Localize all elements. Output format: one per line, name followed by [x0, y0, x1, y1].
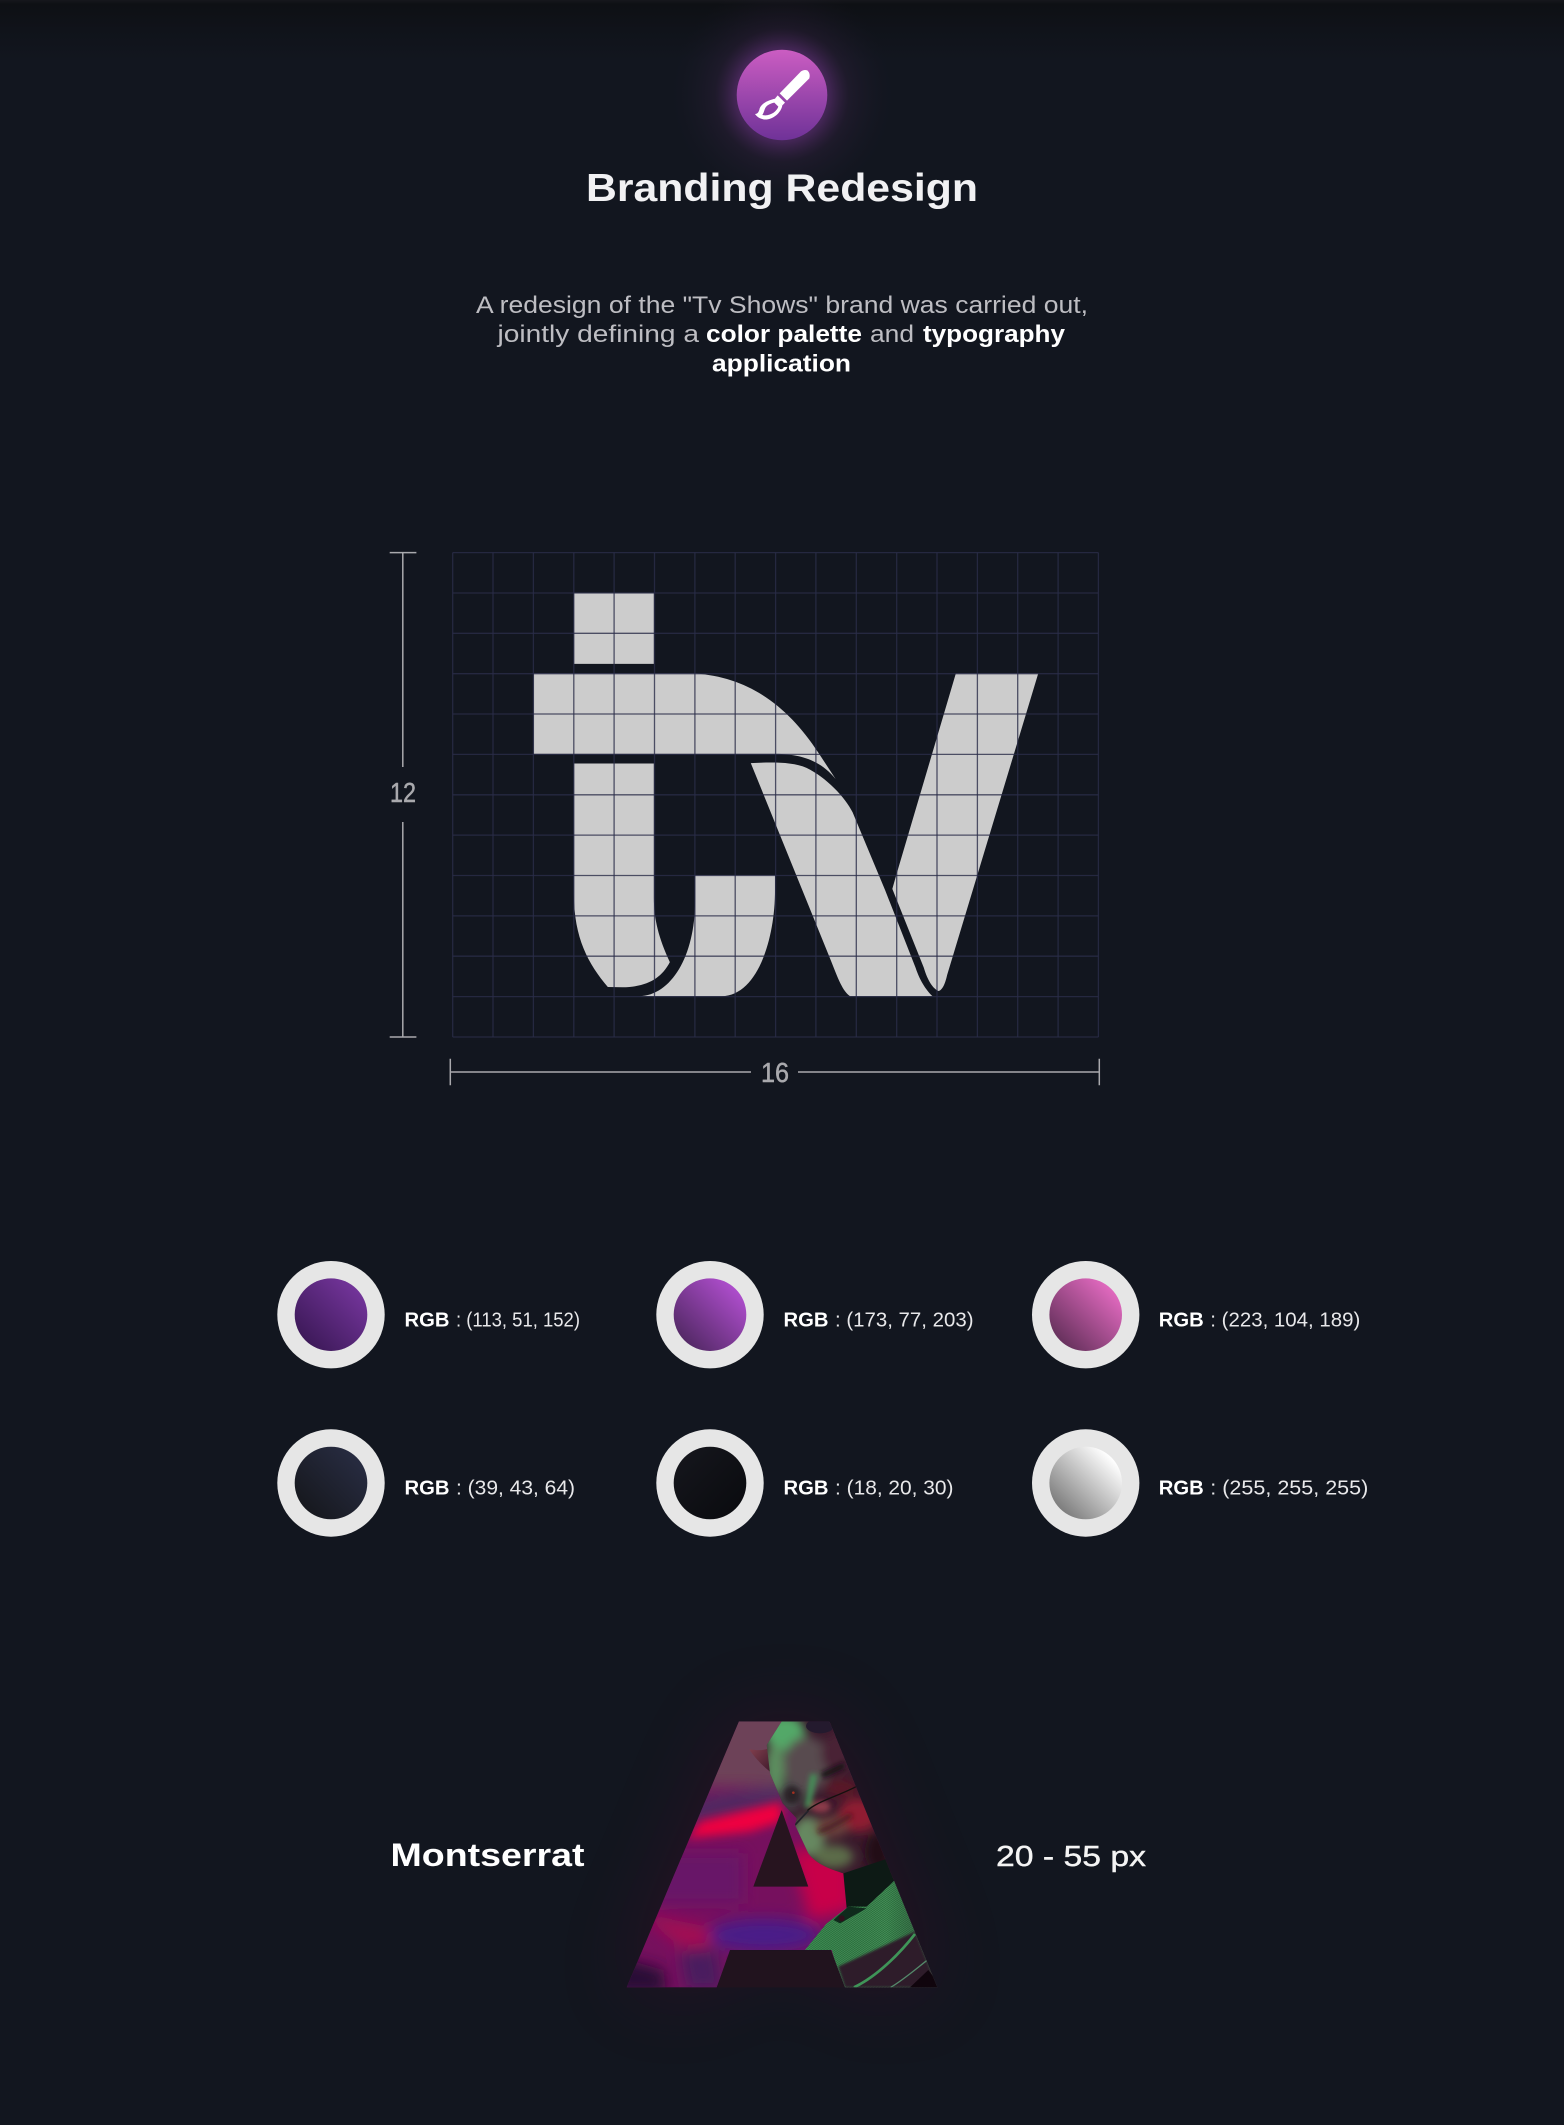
swatch: pink 223,104,189: : (223, 104, 189)	[1210, 1309, 1360, 1332]
swatch: violet 173,77,203	[656, 1261, 974, 1368]
photo figure: neck	[843, 1860, 904, 1908]
header icon: paintbrush badge	[670, 0, 894, 207]
photo-filled letter A	[626, 1717, 938, 1988]
title: Branding Redesign	[586, 167, 978, 210]
photo figure: masked head	[766, 1722, 888, 1874]
swatch: purple 113,51,152: RGB	[404, 1309, 450, 1332]
swatch: slate 39,43,64: RGB	[404, 1476, 450, 1500]
swatch: white 255,255,255	[1032, 1429, 1368, 1537]
dimension: width 16	[450, 1057, 1099, 1088]
type size range: 20 - 55 px	[996, 1841, 1147, 1873]
dimension: height 12: 12	[390, 777, 416, 808]
intro paragraph: and	[870, 321, 914, 348]
intro paragraph: jointly defining a	[496, 321, 700, 348]
swatch: violet 173,77,203: RGB	[784, 1309, 828, 1332]
typeface name: Montserrat	[390, 1837, 585, 1873]
swatch: purple 113,51,152: : (113, 51, 152)	[456, 1309, 580, 1332]
intro paragraph: application	[712, 350, 851, 378]
icon: paintbrush	[755, 70, 810, 119]
swatch: near black 18,20,30: : (18, 20, 30)	[835, 1476, 954, 1500]
swatch: white 255,255,255: RGB	[1159, 1476, 1204, 1500]
swatch: slate 39,43,64	[277, 1429, 575, 1537]
swatch: pink 223,104,189	[1032, 1261, 1360, 1368]
photo figure: mask horn	[750, 1749, 770, 1772]
dimension: width 16: 16	[761, 1057, 789, 1088]
intro paragraph: typography	[923, 321, 1066, 348]
swatch: white 255,255,255: : (255, 255, 255)	[1210, 1476, 1368, 1500]
swatch: violet 173,77,203: : (173, 77, 203)	[835, 1309, 974, 1332]
grid lines	[453, 553, 1098, 1037]
dimension: height 12	[390, 553, 416, 1037]
intro paragraph: color palette	[706, 321, 862, 348]
photo figure: knit shirt	[805, 1880, 940, 1990]
swatch: pink 223,104,189: RGB	[1159, 1309, 1204, 1332]
intro paragraph: A redesign of the "Tv Shows" brand was carried out,	[476, 292, 1088, 319]
tv logo shape	[534, 593, 1038, 996]
swatch: near black 18,20,30	[656, 1429, 954, 1537]
swatch: slate 39,43,64: : (39, 43, 64)	[456, 1476, 575, 1500]
letter counter	[753, 1810, 808, 1887]
logo construction grid	[453, 553, 1098, 1037]
swatch: purple 113,51,152	[277, 1261, 580, 1368]
swatch: near black 18,20,30: RGB	[784, 1476, 828, 1500]
intro paragraph	[476, 292, 1088, 378]
